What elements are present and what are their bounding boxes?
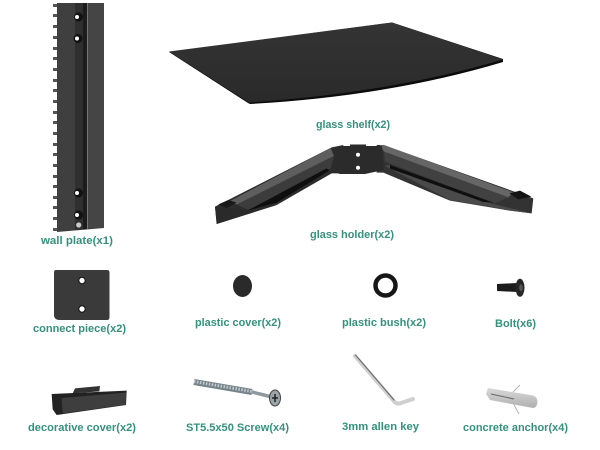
icon: screw xyxy=(194,382,280,406)
icon: decorative cover xyxy=(52,386,127,415)
label: bolt: Bolt(x6) xyxy=(495,318,536,330)
icon: bolt xyxy=(497,279,524,297)
icon: glass holder xyxy=(215,144,533,224)
left arm xyxy=(215,145,343,224)
hub xyxy=(334,144,384,174)
label: glass holder: glass holder(x2) xyxy=(310,229,394,241)
label: plastic cover: plastic cover(x2) xyxy=(195,317,281,329)
label: glass shelf: glass shelf(x2) xyxy=(316,119,390,131)
icon: plastic bush xyxy=(376,276,396,296)
icon: glass shelf xyxy=(169,22,503,104)
label: decorative cover: decorative cover(x2) xyxy=(28,422,136,434)
icon: wall plate xyxy=(53,3,104,232)
icon: allen key xyxy=(355,355,413,404)
icon: plastic cover xyxy=(233,275,252,297)
label: plastic bush: plastic bush(x2) xyxy=(342,317,426,329)
icon: concrete anchor xyxy=(486,385,538,414)
label: connect piece: connect piece(x2) xyxy=(33,323,126,335)
label: wall plate: wall plate(x1) xyxy=(40,235,113,247)
label: concrete anchor: concrete anchor(x4) xyxy=(463,422,568,434)
right arm xyxy=(377,145,533,213)
icon: connect piece xyxy=(54,270,110,320)
label: allen key: 3mm allen key xyxy=(342,421,420,433)
label: screw: ST5.5x50 Screw(x4) xyxy=(186,422,289,434)
